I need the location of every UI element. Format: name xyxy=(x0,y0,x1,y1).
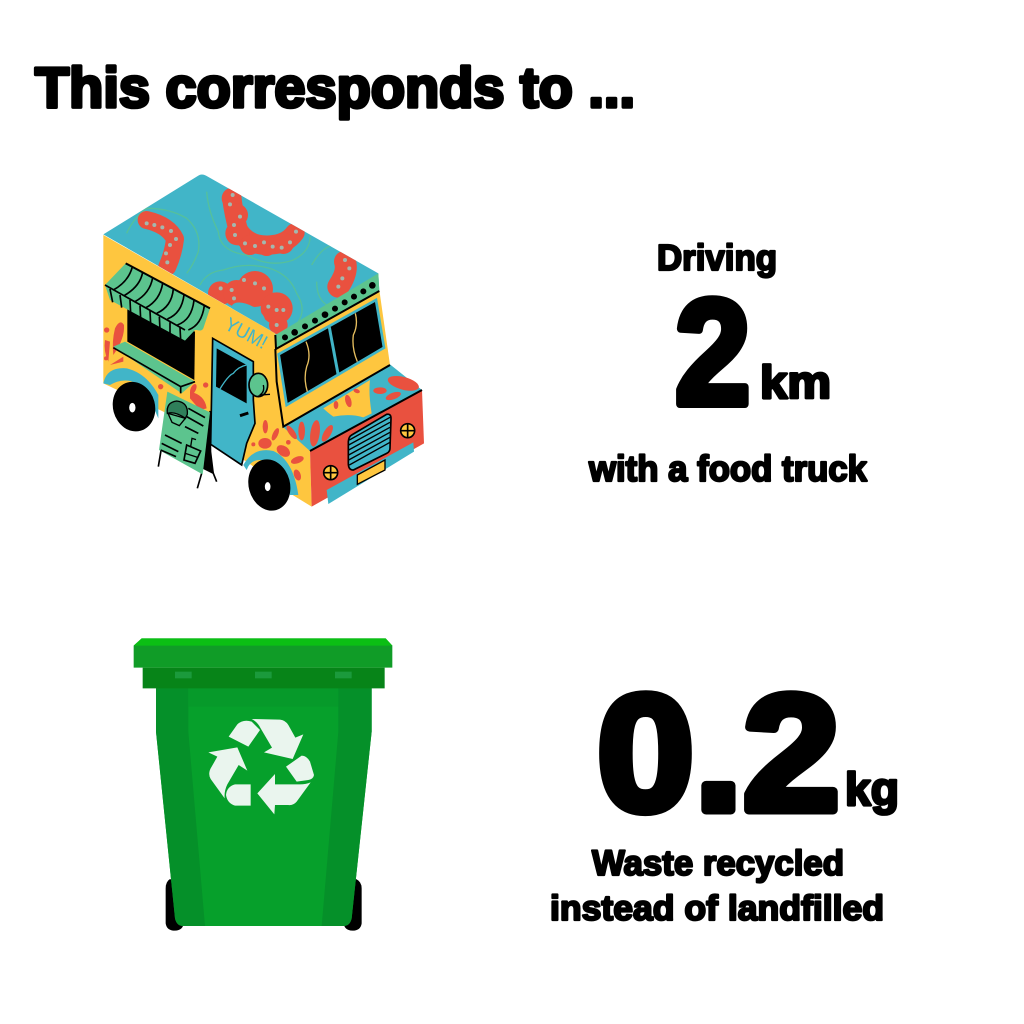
service window xyxy=(127,308,195,380)
label: waste recycled: Waste recycled xyxy=(592,844,844,883)
mirror xyxy=(249,373,268,397)
truck body side xyxy=(103,235,312,507)
rear wheel xyxy=(107,377,161,436)
icon: recycling bin xyxy=(134,638,392,931)
lid xyxy=(134,638,392,668)
recycling symbol xyxy=(208,719,314,814)
yum lettering: YUM! xyxy=(221,314,271,354)
truck roof xyxy=(103,174,379,348)
truck front xyxy=(310,390,424,507)
front visor xyxy=(275,273,379,349)
bumper xyxy=(327,442,414,504)
front wheel xyxy=(243,455,296,515)
number: 2: 2 xyxy=(675,268,750,436)
licence plate xyxy=(357,460,385,484)
unit: km: km xyxy=(760,356,831,408)
text: driving 2 km with a food truck xyxy=(588,237,868,489)
bin side shading xyxy=(156,687,205,926)
label: with a food truck: with a food truck xyxy=(588,448,868,489)
door xyxy=(211,338,255,465)
side splashes xyxy=(104,322,305,481)
cab outline xyxy=(275,349,390,427)
visor dots xyxy=(282,282,376,340)
label: instead of landfilled: instead of landfilled xyxy=(550,889,884,928)
headlights xyxy=(324,424,415,480)
text: 0.2 kg waste recycled xyxy=(550,661,899,928)
menu sign xyxy=(158,392,217,488)
unit: kg: kg xyxy=(845,763,899,815)
front wheel arch xyxy=(243,450,298,495)
icon: food truck xyxy=(103,174,424,515)
window shelf xyxy=(113,342,195,393)
lid hinges xyxy=(175,672,352,678)
lid rim xyxy=(143,668,385,688)
awning xyxy=(105,263,210,341)
rear wheel arch xyxy=(103,368,158,418)
title: This corresponds to ... xyxy=(35,56,635,120)
windshield xyxy=(279,300,384,405)
hood xyxy=(283,364,422,451)
roof pattern xyxy=(127,188,351,334)
number: 0.2: 0.2 xyxy=(597,661,840,845)
wheels xyxy=(166,879,183,931)
bin body xyxy=(156,687,372,926)
hood petals xyxy=(285,373,420,447)
grille xyxy=(348,414,391,470)
bin top shadow xyxy=(188,688,338,707)
cab yellow panel xyxy=(275,290,390,427)
label: driving: Driving xyxy=(657,237,777,278)
